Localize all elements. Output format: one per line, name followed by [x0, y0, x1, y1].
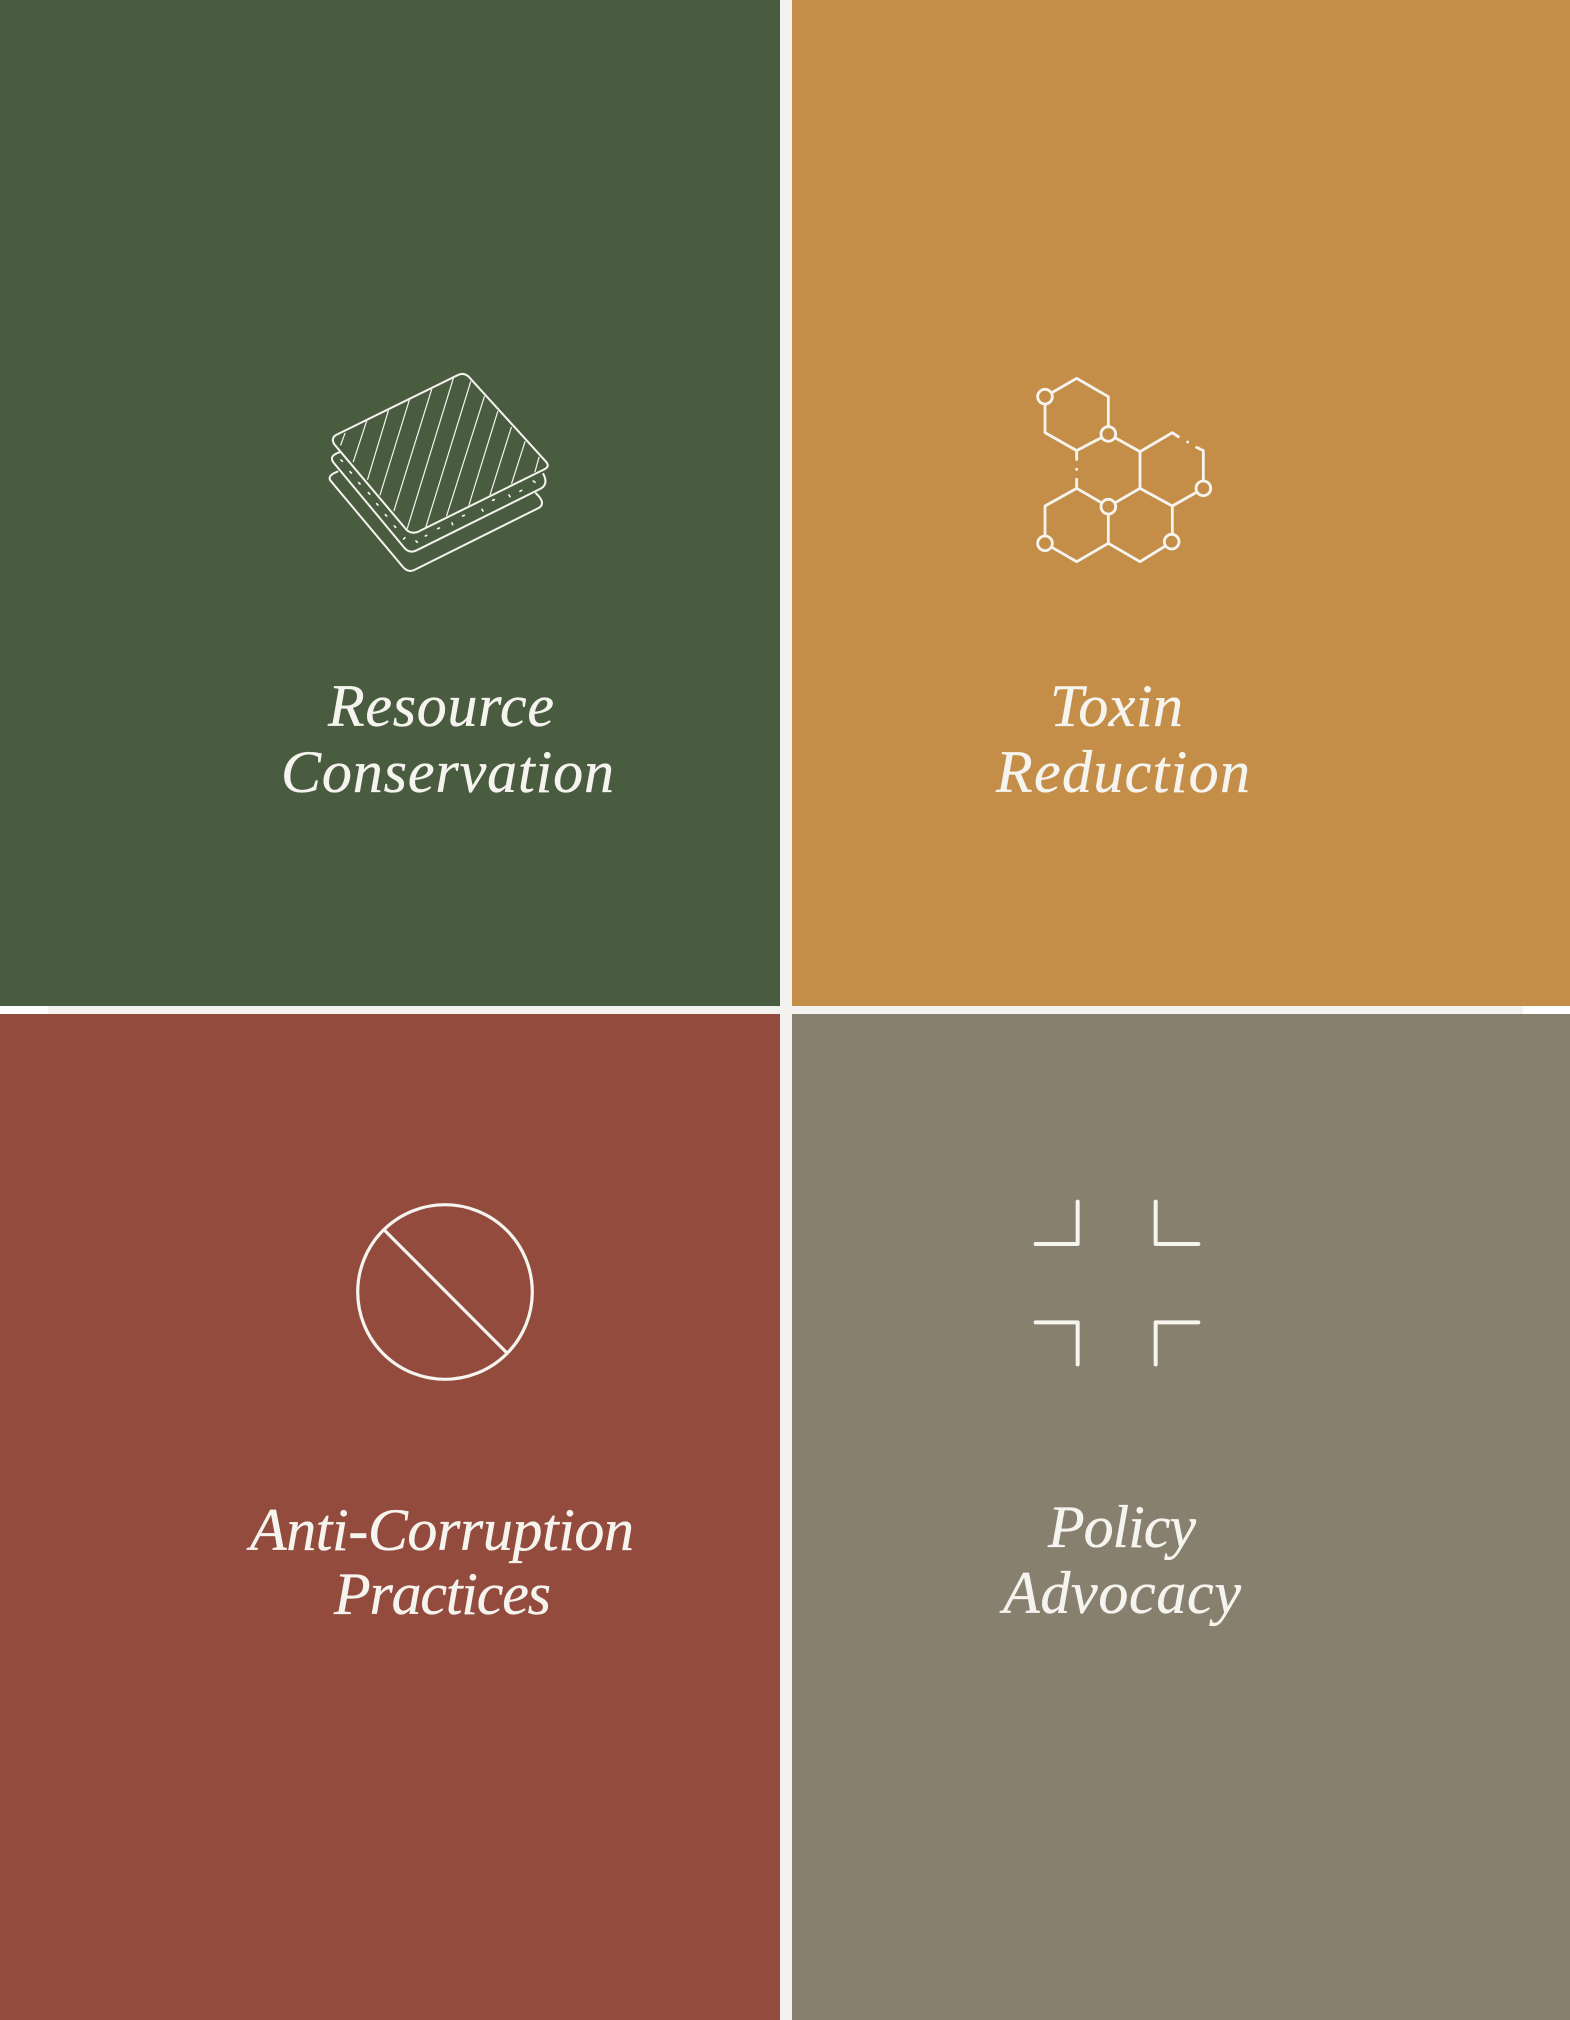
icon: prohibition circle [358, 1205, 532, 1379]
icon: hexagon molecule [1038, 378, 1211, 562]
heading: Anti-Corruption Practices [246, 1497, 634, 1627]
heading: Anti-Corruption Practices: Practices [333, 1561, 551, 1627]
panel background: green [0, 0, 780, 1006]
heading: Anti-Corruption Practices: Anti-Corruption [246, 1497, 634, 1563]
heading: Policy Advocacy [999, 1494, 1241, 1626]
icon: stacked hatched sheets [330, 374, 548, 571]
heading: Resource Conservation [281, 673, 614, 805]
heading: Toxin Reduction: Reduction [995, 739, 1250, 805]
panel: policy advocacy [792, 1014, 1570, 2020]
heading: Resource Conservation: Resource [327, 673, 554, 739]
heading: Toxin Reduction [995, 673, 1250, 805]
heading: Policy Advocacy: Advocacy [999, 1560, 1241, 1626]
panel: toxin reduction [792, 0, 1570, 1006]
panel: anti-corruption practices [0, 1014, 780, 2020]
heading: Policy Advocacy: Policy [1047, 1494, 1196, 1560]
icon: four inward corners [1036, 1202, 1198, 1364]
heading: Resource Conservation: Conservation [281, 739, 614, 805]
panel background: ochre [792, 0, 1570, 1006]
panel: resource conservation [0, 0, 780, 1006]
heading: Toxin Reduction: Toxin [1050, 673, 1183, 739]
panel background: brick red [0, 1014, 780, 2020]
panel background: grey [792, 1014, 1570, 2020]
